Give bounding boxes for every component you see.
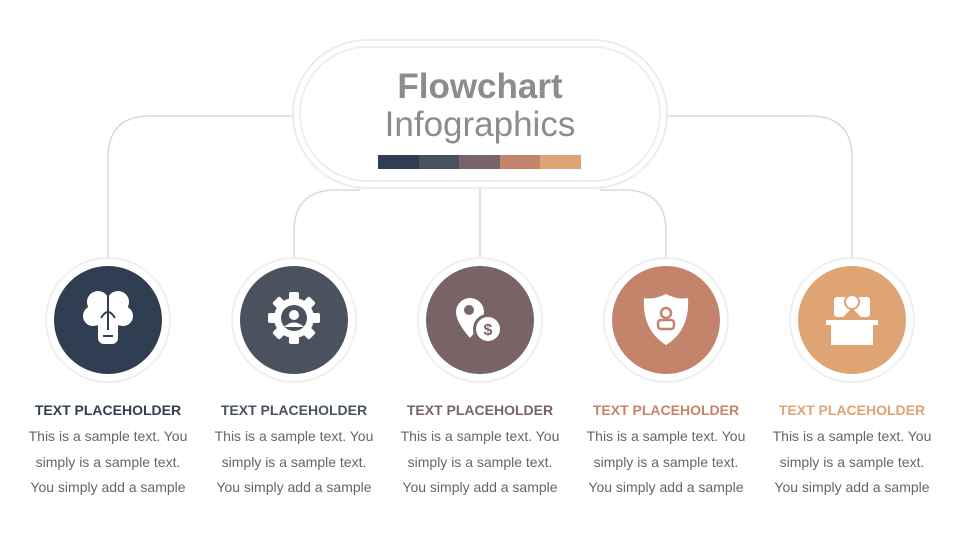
- column 5 text: This is a sample text. You: [773, 428, 931, 444]
- column 5 text: TEXT PLACEHOLDER: [779, 402, 925, 418]
- column 2 text: [214, 402, 373, 495]
- icon: pin dollar: $: [484, 322, 493, 339]
- color bar: [378, 155, 581, 169]
- column 5 text: simply is a sample text.: [780, 454, 924, 470]
- column 3 text: TEXT PLACEHOLDER: [407, 402, 553, 418]
- column 4 text: You simply add a sample: [588, 479, 744, 495]
- column 4 text: This is a sample text. You: [587, 428, 745, 444]
- column 1 text: [28, 402, 187, 495]
- column 2 text: You simply add a sample: [216, 479, 372, 495]
- icon: shield person: [644, 294, 688, 345]
- icon: pin dollar: [456, 298, 503, 344]
- icon: gear person: [268, 292, 320, 344]
- column 5 text: [772, 402, 931, 495]
- column 3 text: You simply add a sample: [402, 479, 558, 495]
- column 4 text: simply is a sample text.: [594, 454, 738, 470]
- column 4 text: TEXT PLACEHOLDER: [593, 402, 739, 418]
- column 3 text: [400, 402, 559, 495]
- column 3 text: simply is a sample text.: [408, 454, 552, 470]
- column 1 text: simply is a sample text.: [36, 454, 180, 470]
- column 4 text: [586, 402, 745, 495]
- title: Infographics: [385, 105, 575, 144]
- column 3 text: This is a sample text. You: [401, 428, 559, 444]
- title: Flowchart: [397, 67, 563, 106]
- icon: brain bulb: [83, 291, 133, 344]
- column 1 text: This is a sample text. You: [29, 428, 187, 444]
- column 2 text: simply is a sample text.: [222, 454, 366, 470]
- circles: [46, 258, 914, 382]
- title pill: [293, 40, 667, 188]
- column 2 text: TEXT PLACEHOLDER: [221, 402, 367, 418]
- icon: podium: [826, 295, 878, 345]
- column 1 text: TEXT PLACEHOLDER: [35, 402, 181, 418]
- column 1 text: You simply add a sample: [30, 479, 186, 495]
- column 5 text: You simply add a sample: [774, 479, 930, 495]
- column 2 text: This is a sample text. You: [215, 428, 373, 444]
- title: [385, 67, 575, 144]
